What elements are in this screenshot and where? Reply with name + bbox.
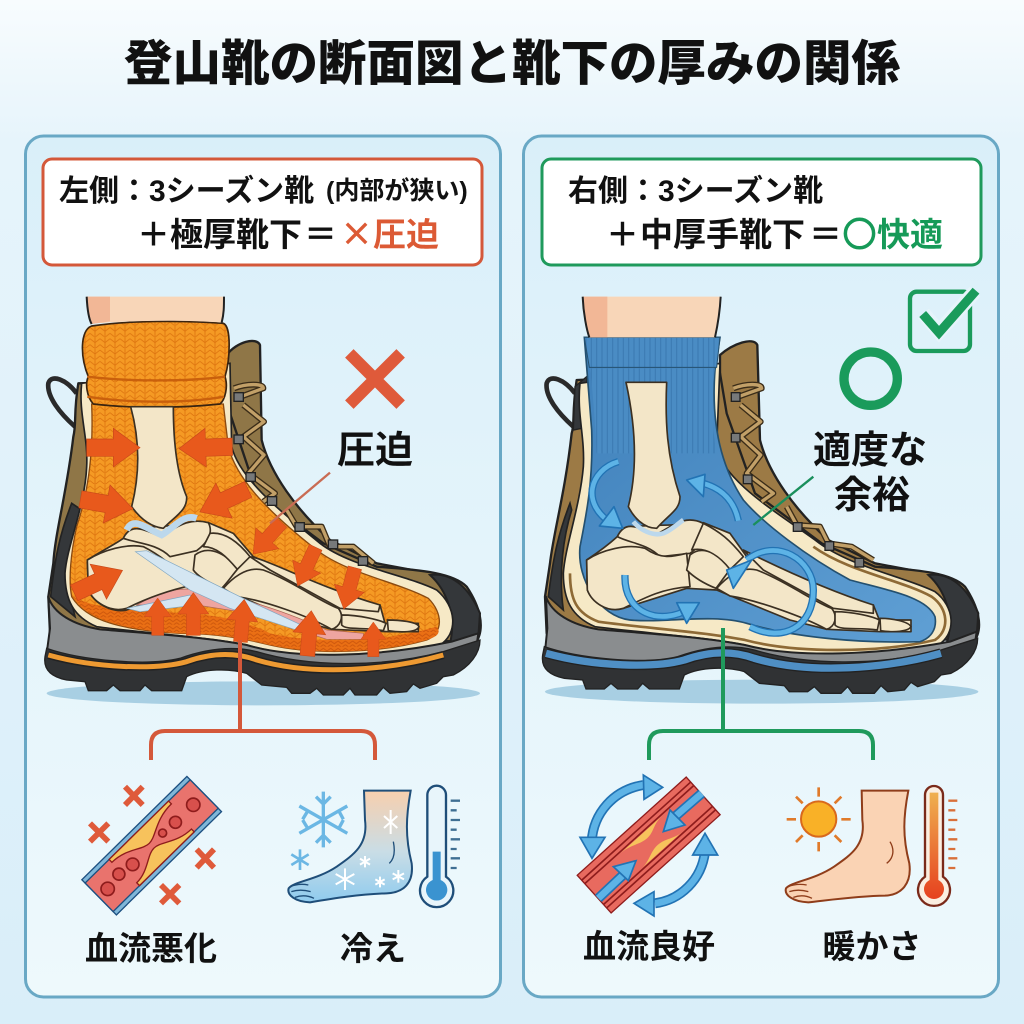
midsole stripe bbox=[546, 653, 941, 668]
liner bbox=[65, 363, 453, 656]
foot bone underlay bbox=[87, 523, 418, 632]
outsole bbox=[45, 640, 480, 695]
muscle bbox=[137, 589, 363, 639]
shaft front and tongue bbox=[720, 341, 938, 613]
ankle ligament bbox=[127, 517, 197, 535]
icon: cold foot bbox=[288, 791, 412, 902]
midsole stripe outline bbox=[546, 653, 941, 668]
right heading box bbox=[542, 159, 981, 265]
midsole stripe bbox=[48, 655, 443, 670]
icon: foot snowflakes bbox=[336, 810, 404, 890]
icon: cold foot toes bbox=[290, 842, 394, 898]
toe cap bbox=[928, 575, 978, 643]
left heading box: ＋ bbox=[137, 216, 170, 253]
label: good blood flow: 血流良好 bbox=[583, 928, 715, 965]
circulation arrow heads bbox=[599, 474, 752, 623]
panel: right bbox=[524, 136, 998, 997]
toe cap bbox=[430, 575, 480, 643]
heel loop bbox=[547, 379, 575, 427]
icon: warm foot toes bbox=[788, 842, 893, 898]
icon: healthy vessel bbox=[577, 777, 720, 913]
title: 登山靴の断面図と靴下の厚みの関係 bbox=[124, 37, 900, 91]
right heading box: ○ bbox=[843, 208, 876, 256]
right heading box: 右側：3シーズン靴 bbox=[568, 174, 823, 208]
laces bbox=[733, 385, 873, 560]
eyelets bbox=[234, 393, 368, 565]
icon: sun bbox=[787, 787, 851, 851]
right connector bbox=[649, 628, 873, 760]
boot upper bbox=[545, 373, 979, 640]
heel collar dark bbox=[573, 377, 590, 430]
left boot cross-section bbox=[45, 297, 481, 705]
heel counter bbox=[548, 503, 572, 610]
liner seam bbox=[570, 547, 945, 650]
right heading box: 快適 bbox=[877, 216, 943, 253]
leg outline bbox=[583, 297, 721, 337]
left heading box bbox=[43, 159, 482, 265]
icon: small snowflake bbox=[291, 849, 309, 870]
left heading box: (内部が狭い) bbox=[326, 176, 468, 205]
right boot cross-section bbox=[542, 291, 979, 704]
leg bbox=[87, 297, 224, 324]
heel counter bbox=[51, 503, 82, 617]
ground shadow bbox=[545, 680, 978, 704]
icon: large snowflake bbox=[299, 792, 347, 847]
icon: cold thermometer bbox=[420, 786, 460, 907]
midsole bbox=[545, 597, 977, 665]
right heading box: ＝ bbox=[809, 216, 842, 253]
leg shade bbox=[583, 297, 607, 337]
bottom icons right bbox=[577, 775, 957, 916]
left heading box: 圧迫 bbox=[373, 216, 439, 253]
left heading box: 極厚靴下 bbox=[170, 216, 302, 253]
shaft front and tongue bbox=[227, 341, 440, 613]
check stroke bbox=[923, 291, 976, 333]
check mark bbox=[923, 292, 975, 332]
bones bbox=[587, 382, 911, 632]
icon: blocked vessel bbox=[82, 776, 221, 915]
label: warmth: 暖かさ bbox=[822, 928, 922, 965]
sock sole band bbox=[73, 597, 439, 651]
blue sock bbox=[580, 337, 935, 642]
icon: cycle arrow heads bbox=[580, 775, 718, 916]
panel: left bbox=[26, 136, 500, 997]
midsole stripe outline bbox=[48, 655, 443, 670]
sock cuff bbox=[82, 321, 229, 407]
label: room line 2: 余裕 bbox=[834, 475, 910, 517]
icon: cycle arrows inner bbox=[592, 785, 705, 903]
sock shin ribbing bbox=[590, 368, 717, 453]
right heading box: 中厚手靴下 bbox=[640, 216, 805, 253]
circulation arrows bbox=[592, 462, 813, 633]
circle mark bbox=[844, 352, 897, 405]
icon: vessel flow arrows bbox=[598, 793, 702, 898]
foot bone underlay bbox=[587, 523, 911, 632]
icon: warm foot bbox=[786, 791, 910, 902]
leader line bbox=[270, 473, 330, 523]
tendon bbox=[127, 551, 305, 631]
x mark bbox=[349, 353, 401, 405]
heel loop bbox=[48, 379, 77, 427]
label: cold: 冷え bbox=[340, 930, 406, 967]
label: pressure: 圧迫 bbox=[337, 430, 413, 472]
ground shadow bbox=[47, 681, 480, 705]
left heading box: ＝ bbox=[304, 216, 337, 253]
check box bbox=[910, 292, 970, 351]
label: moderate room: 適度な bbox=[813, 430, 927, 472]
left heading box: 左側：3シーズン靴 bbox=[59, 174, 314, 208]
outsole bbox=[542, 638, 978, 693]
label: poor blood flow: 血流悪化 bbox=[85, 930, 217, 967]
midsole bbox=[47, 597, 478, 667]
liner bbox=[563, 363, 951, 655]
thick orange sock bbox=[70, 404, 439, 651]
sock cuff bbox=[584, 337, 720, 367]
left heading box: × bbox=[340, 208, 373, 256]
cuff fold bbox=[87, 377, 225, 402]
leg outline bbox=[87, 297, 224, 324]
icon: vessel flow arrows inner bbox=[598, 793, 702, 898]
laces bbox=[234, 385, 373, 563]
left connector bbox=[151, 640, 375, 760]
icon: cycle arrows bbox=[592, 785, 705, 903]
eyelets bbox=[731, 393, 864, 567]
leader line bbox=[753, 477, 813, 525]
icon: warm thermometer bbox=[918, 786, 957, 906]
pressure arrows bbox=[66, 427, 386, 657]
right heading box: ＋ bbox=[606, 216, 639, 253]
icon: x marks bbox=[90, 787, 214, 903]
icon: vessel arrow heads bbox=[613, 810, 685, 881]
boot upper bbox=[48, 380, 481, 642]
leg bbox=[583, 297, 721, 337]
bones bbox=[87, 407, 419, 632]
bottom icons left bbox=[82, 776, 460, 915]
leg shade bbox=[87, 297, 110, 324]
ankle ligament bbox=[633, 520, 683, 534]
